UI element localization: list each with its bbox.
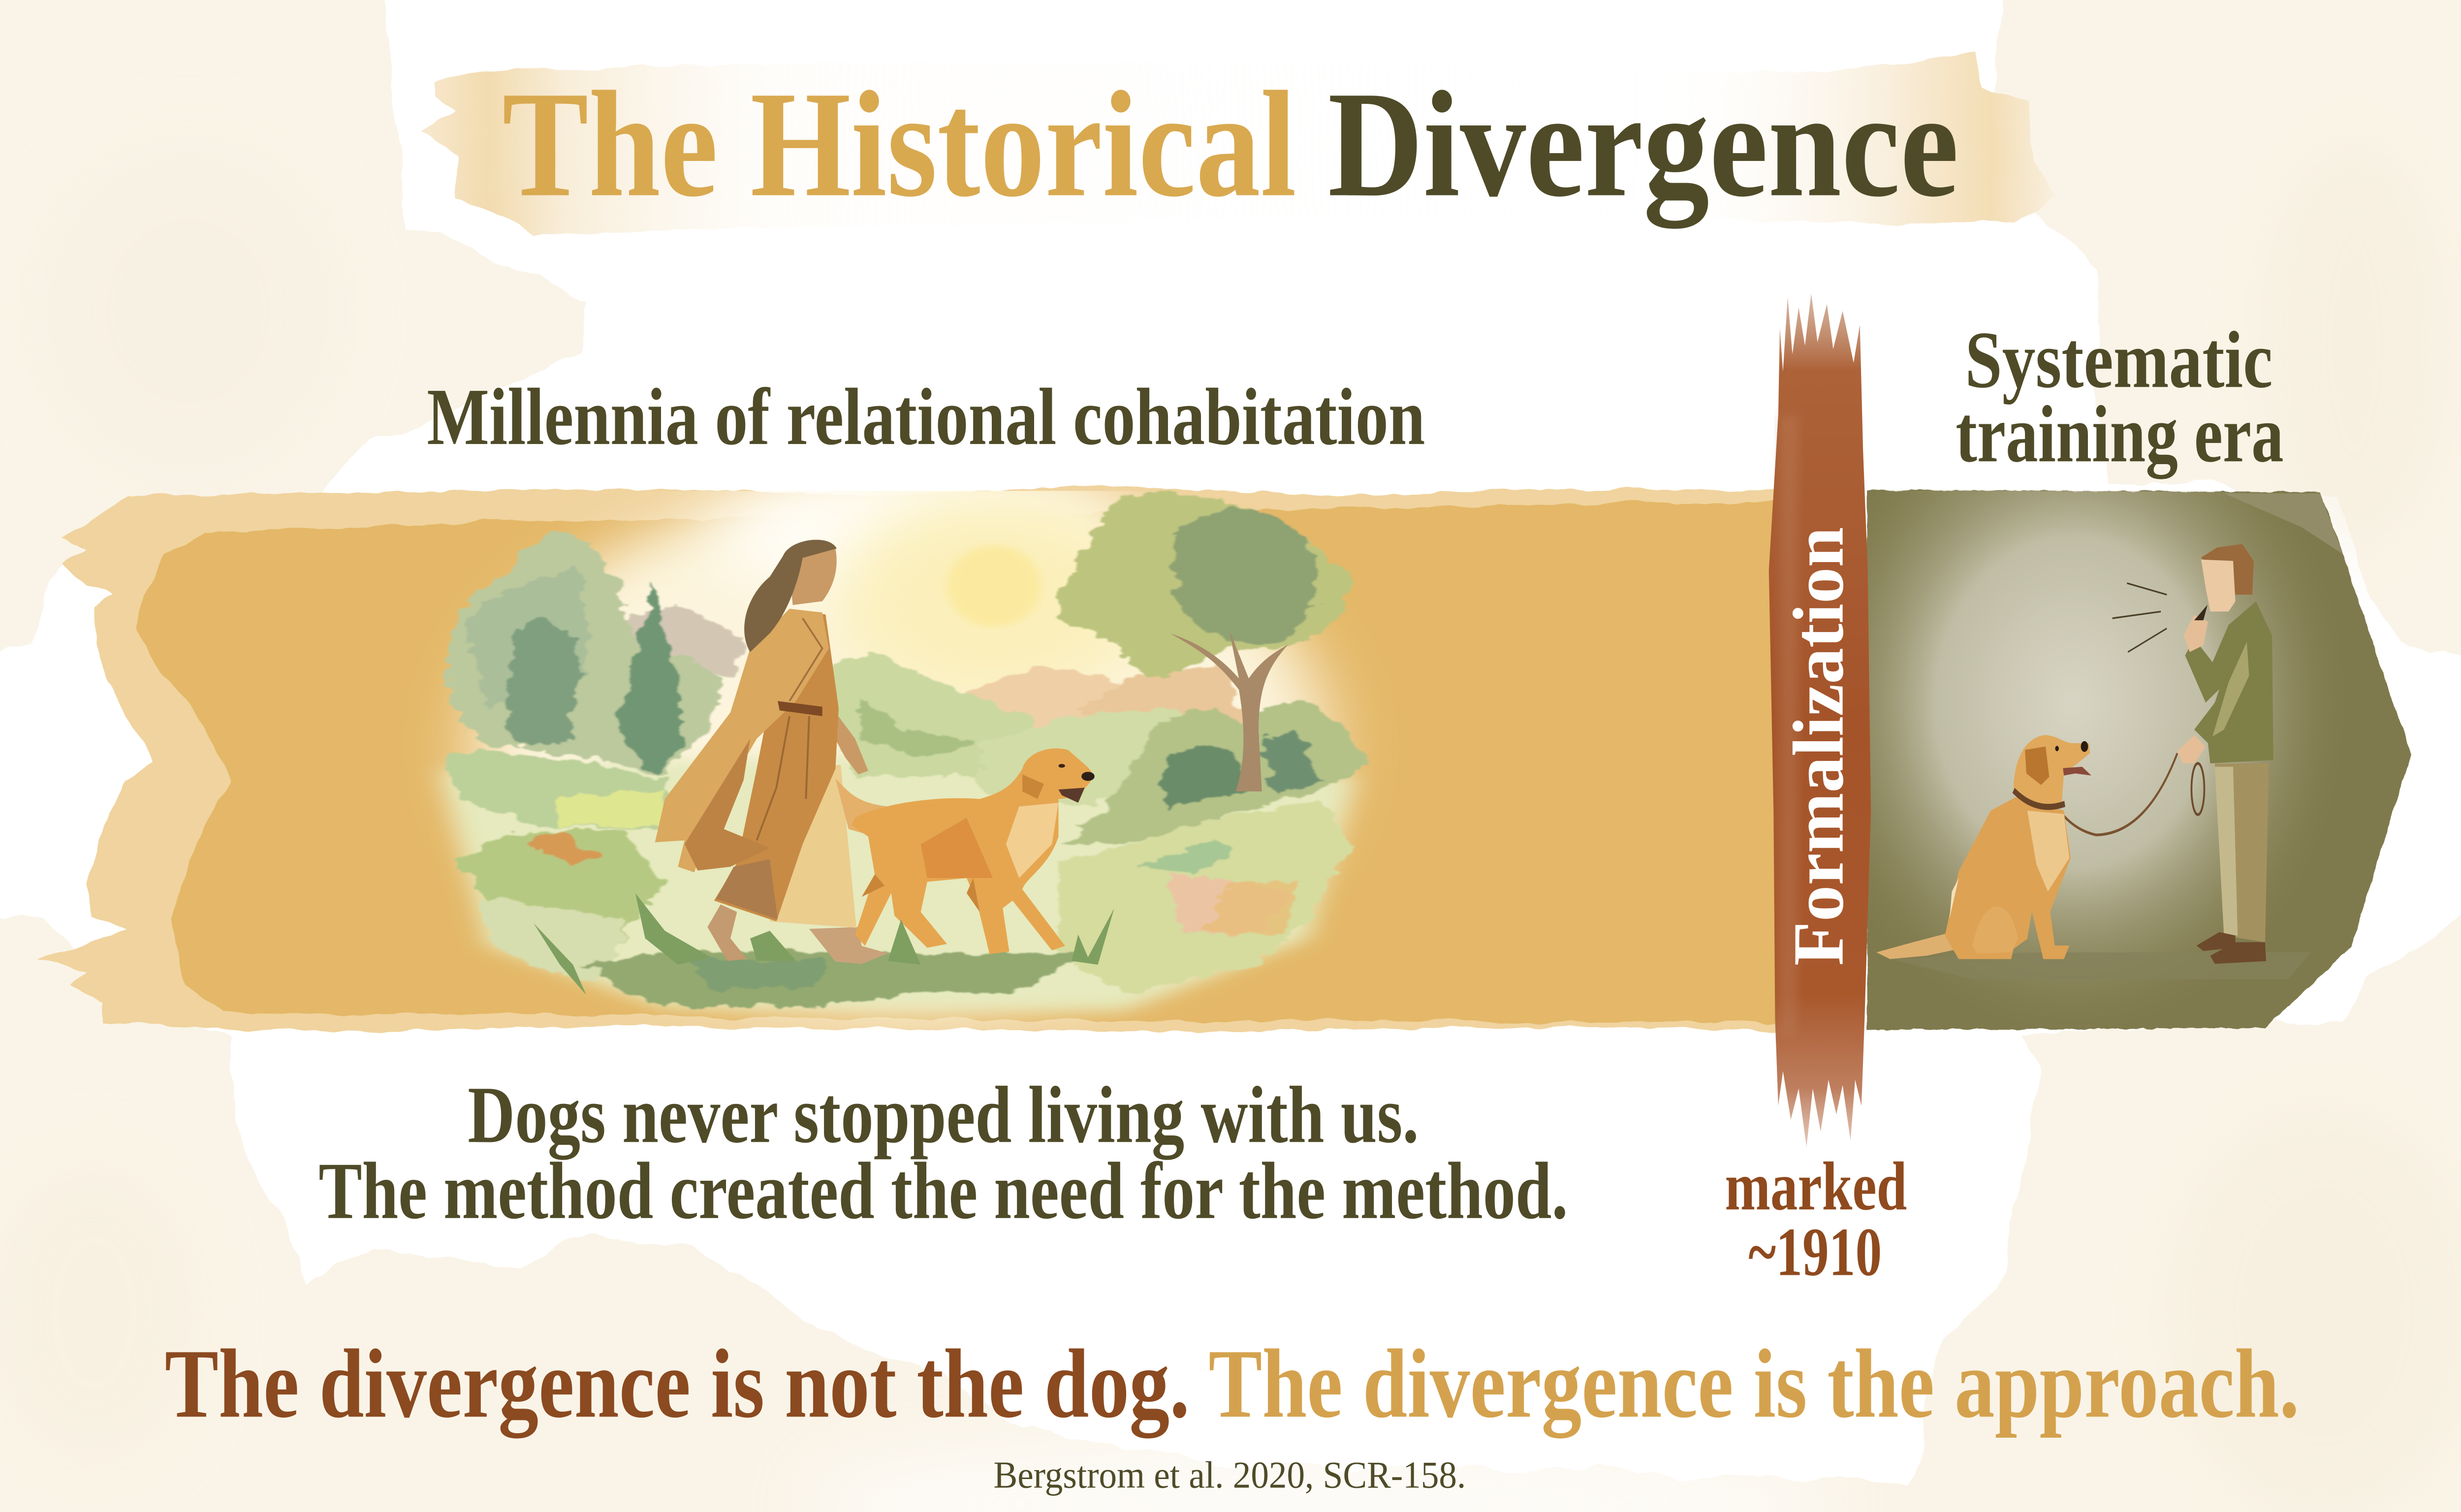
label: marked ~1910: ~1910 bbox=[1748, 1214, 1882, 1291]
statement: dogs never stopped bbox=[318, 1071, 1568, 1236]
foreground grass bbox=[534, 893, 1114, 995]
brush stroke: formalization divider bbox=[1769, 294, 1871, 1147]
label: formalization: Formalization bbox=[1779, 527, 1859, 966]
statement: dogs never stopped: The method created the need for the method. bbox=[318, 1146, 1568, 1236]
heading: millennia: Millennia of relational cohabitation bbox=[427, 373, 1425, 462]
woman bbox=[655, 540, 888, 964]
panel: olive training-era arrow bbox=[1866, 489, 2411, 1031]
leash bbox=[2064, 753, 2177, 835]
label: marked ~1910: marked bbox=[1725, 1148, 1907, 1225]
trainer with whistle bbox=[2177, 544, 2273, 964]
citation: Bergstrom et al. 2020, SCR-158. bbox=[993, 1453, 1466, 1496]
heading: systematic training era: Systematic bbox=[1965, 315, 2272, 405]
statement: dogs never stopped: Dogs never stopped living with us. bbox=[468, 1071, 1419, 1160]
whistle sound lines bbox=[2113, 583, 2167, 652]
icon: sun bbox=[947, 545, 1041, 627]
icon: tree trunk bbox=[1170, 630, 1288, 791]
dog bbox=[835, 748, 1095, 954]
seated dog bbox=[1876, 735, 2091, 959]
title backing wash bbox=[421, 52, 2056, 235]
conclusion line bbox=[165, 1330, 2300, 1438]
conclusion line: The divergence is the approach. bbox=[1208, 1330, 2300, 1438]
title: The Historical bbox=[502, 60, 1296, 228]
ground shadow bbox=[1890, 952, 2311, 979]
illustration: woman and dog walking in a landscape bbox=[442, 472, 1367, 1010]
panel: golden timeline band bbox=[39, 485, 1781, 1032]
heading: systematic training era bbox=[1956, 315, 2284, 479]
title bbox=[502, 60, 1959, 231]
label: marked ~1910 bbox=[1725, 1148, 1907, 1291]
title: Divergence bbox=[1328, 60, 1959, 231]
heading: systematic training era: training era bbox=[1956, 390, 2284, 479]
conclusion line: The divergence is not the dog. bbox=[165, 1330, 1190, 1438]
